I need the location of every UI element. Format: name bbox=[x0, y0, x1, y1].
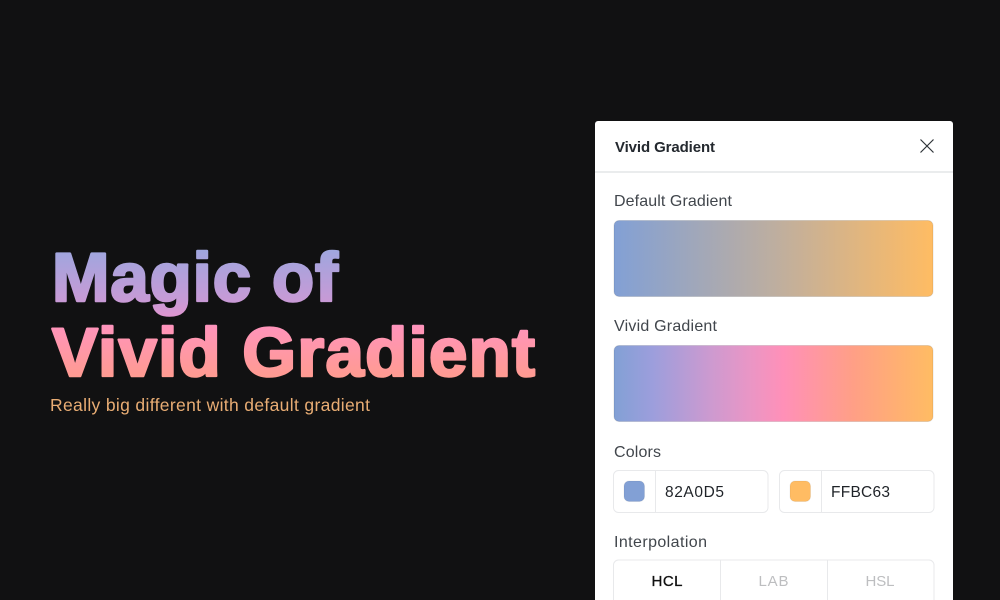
default gradient bar bbox=[614, 220, 933, 296]
title: Vivid Gradient bbox=[52, 314, 535, 391]
vivid gradient bar bbox=[614, 346, 933, 422]
interpolation selector bbox=[614, 560, 934, 600]
color input: 82A0D5 bbox=[614, 470, 768, 512]
option: HCL: HCL bbox=[652, 573, 682, 590]
value: FFBC63: FFBC63 bbox=[831, 484, 890, 501]
panel: vivid gradient bbox=[595, 121, 953, 600]
value: 82A0D5: 82A0D5 bbox=[665, 484, 724, 501]
icon: close bbox=[920, 140, 934, 152]
color input: FFBC63 bbox=[780, 470, 934, 512]
option: LAB: LAB bbox=[758, 573, 788, 590]
label: colors: Colors bbox=[614, 444, 661, 461]
label: vivid gradient: Vivid Gradient bbox=[614, 318, 718, 335]
title: Magic of bbox=[52, 239, 339, 316]
subtitle: Really big different with default gradient bbox=[50, 395, 370, 415]
label: default gradient: Default Gradient bbox=[614, 193, 733, 210]
swatch: blue bbox=[624, 481, 644, 502]
panel background bbox=[595, 121, 953, 600]
panel header title: Vivid Gradient bbox=[615, 139, 715, 156]
title bbox=[52, 239, 535, 391]
option: HSL: HSL bbox=[866, 573, 894, 590]
swatch: orange bbox=[790, 481, 810, 502]
label: interpolation: Interpolation bbox=[614, 534, 707, 551]
